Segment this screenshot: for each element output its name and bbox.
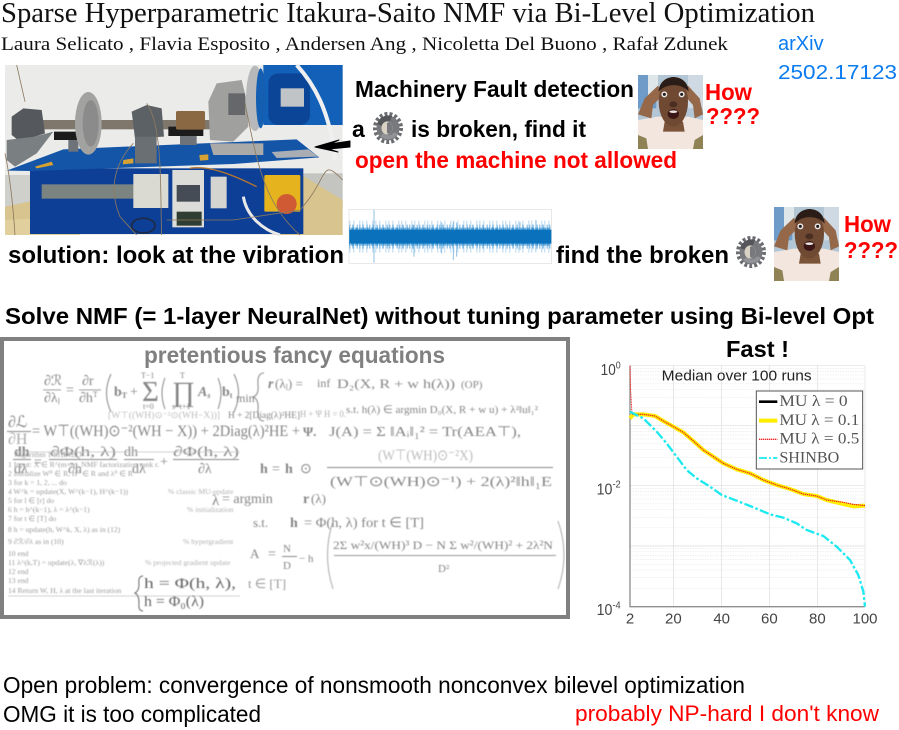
equations block: dh [124,445,138,460]
equations block: λ [212,493,220,509]
red remark: probably NP-hard I don't know [575,701,879,726]
equations block: s [206,391,210,400]
icon: gear [376,114,400,142]
text: find the broken: find the broken [556,242,729,269]
equations block: = [66,383,74,398]
x axis labels: 80 [809,611,826,628]
x axis labels: 60 [761,611,778,628]
legend: SHINBO [779,449,839,466]
y axis labels: 10 [601,362,618,379]
y axis labels: 10 [597,481,614,498]
equations block: ∂h [68,462,82,477]
equations block: T [93,390,98,399]
algorithm listing: 6 h = h^(k−1), λ = λ^(k−1) [8,505,90,514]
callout: how: How [705,79,752,105]
equations block: + [130,385,138,400]
algorithm listing: 3 for k = 1, 2, ... do [8,478,67,487]
equations block: ∂h [79,391,93,406]
equations block: 2Σ w²x/(WH)³ D − N Σ w²/(WH)² + 2λ²N [333,538,553,552]
equations block: = Φ(h, λ) for t ∈ [T] [304,516,424,531]
equations block: D [283,560,291,572]
y axis labels: -2 [612,480,621,491]
algorithm listing: Algorithm 1 SHINBO [14,450,82,459]
y axis labels: 10 [597,602,614,619]
x axis labels [626,611,878,628]
equations block: ∂H [8,431,28,448]
x axis labels: 20 [665,611,682,628]
equations block: (λ [275,376,286,391]
equations block: h [260,462,268,477]
equations block: H + 2[Diag(λ)²HE] [228,410,300,420]
panel heading: pretentious fancy equations [144,342,445,368]
arXiv reference: 2502.17123 [778,62,897,84]
equations block: [W⊤((WH)⊙⁻²⊙(WH−X))] [108,410,220,420]
photo: machinery test rig [5,65,343,235]
chart: vibration waveform [349,209,552,263]
equations block: l [286,383,289,392]
equations block: Σ [142,376,159,408]
algorithm listing: 9 ∂ℛ/∂λ as in (10) [8,537,64,546]
callout: how: How [844,211,891,237]
arrow pointing at machine [315,140,350,152]
equations block: Ψ. [303,424,316,439]
equations block: t [230,391,233,400]
x axis labels: 100 [852,611,878,628]
series: MU lambda 0.5 [632,414,865,506]
constraint system [135,576,286,611]
algorithm listing: 11 λ^(k,T) = update(λ, ∇λℛ(λ)) [8,558,105,567]
equations block: (λ) [311,491,326,506]
equations block: A [250,546,260,561]
algorithm listing: 5 for l ∈ [r] do [8,496,54,505]
panel: pretentious fancy equations [2,339,568,617]
algorithm listing: 14 Return W, H, λ at the last iteration [8,586,122,595]
y axis labels [597,360,621,619]
equations block: s.t. [253,515,268,530]
equations block [7,371,564,611]
series: MU lambda 0.1 [630,414,865,506]
legend: MU λ = 0.5 [779,431,860,448]
series: MU lambda 0.5 spike [630,366,632,414]
equations block: h [285,462,293,477]
chart: convergence curves [597,360,878,628]
open problem text: OMG it is too complicated [3,701,261,727]
equations block: H + Ψ H = 0. [300,409,346,419]
algorithm listing: 8 h = update(h, W^k, X, λ) as in (12) [8,525,121,534]
equations block: ∂r [82,374,94,389]
equations block: t=0 [143,402,154,411]
equations block: ∂ℒ [8,414,27,431]
algorithm listing: 1 Input: X ∈ R^(m×n), NMF factorization rank r. [8,460,159,469]
equations block: = [272,462,280,477]
text: a gear is broken: a [352,116,365,142]
callout: how: ???? [706,103,760,129]
open problem text [3,672,745,727]
y axis labels: 0 [616,360,621,371]
icon: shocked face [774,207,839,281]
equations block: A [198,385,207,400]
equations block: = W⊤((WH)⊙⁻²(WH − X)) + 2Diag(λ)²HE + [32,423,300,440]
callout: how [844,211,898,263]
text: a gear is broken: is broken, find it [411,116,586,142]
callout: how [705,79,760,129]
equations block: (W⊤⊙(WH)⊙⁻¹) + 2(λ)²‖h‖₁E [330,475,552,490]
equations block: b [114,385,122,400]
algorithm listing: 10 end [8,549,29,558]
equations block: ∂λ [198,462,212,477]
equations block: dλ [14,462,28,477]
equations block: s.t. h(λ) ∈ argmin D₀(X, R + w u) + λ²‖u‖₁² [346,404,539,416]
equations block: T [180,371,185,380]
algorithm listing [8,450,234,595]
equations block: h [290,516,298,531]
algorithm listing: 2 Initialize W⁰ ∈ R, H⁰ ∈ R and λ⁰ ∈ R [8,469,134,478]
chart note: Median over 100 runs [662,368,812,384]
icon: gear [738,238,764,266]
algorithm listing: 13 end [8,576,29,585]
authors: Laura Selicato , Flavia Esposito , Andersen Ang , Nicoletta Del Buono , Rafał Zdunek [1,35,729,55]
equations block: ∂ℛ [44,374,62,389]
equations block: ∂Φ(h, λ) [50,445,116,460]
equations block: dh [14,445,30,460]
equations block: ) = [288,376,303,391]
equations block: l [58,397,61,406]
equations block: − h [299,553,314,565]
algorithm listing: 4 W^k = update(X, W^(k−1), H^(k−1)) [8,487,129,496]
x axis labels: 40 [713,611,730,628]
equations block: T−1 [141,371,154,380]
heading: machinery fault detection: Machinery Fault detection [355,76,634,102]
equations block: + [160,455,168,470]
legend [756,391,863,469]
equations block: ⊙ [300,462,312,477]
equations block: T [122,391,128,400]
constraint system: h = Φ(h, λ), [144,576,236,592]
algorithm listing: % projected gradient update [145,558,231,567]
constraint system: h = Φ₀(λ) [144,594,204,610]
arXiv reference: arXiv [778,33,824,55]
algorithm listing: % classic MU-update [168,487,234,496]
series: SHINBO [630,412,865,607]
equations block: N [283,543,291,555]
x axis labels: 2 [626,611,634,628]
open problem text: Open problem: convergence of nonsmooth nonconvex bilevel optimization [3,672,745,698]
series: MU lambda 0 [827,500,865,506]
equations block: (OP) [461,379,483,391]
equations block: r [268,377,274,392]
legend: MU λ = 0 [779,393,848,410]
equations block: = argmin [222,492,273,507]
equations block: ∏ [172,377,195,408]
icon: shocked face [638,75,703,149]
equations block: J(A) = Σ ‖Aᵢ‖₁² = Tr(AEA⊤), [329,425,521,440]
constraint system: t ∈ [T] [248,576,286,591]
equations block: inf [317,376,330,390]
equations block: (W⊤(WH)⊙⁻²X) [378,448,473,464]
equations block: s=t+1 [172,402,190,411]
equations block: = [34,455,42,470]
warning text: open the machine not allowed [355,147,677,173]
legend: MU λ = 0.1 [779,412,859,429]
text: solution: solution: look at the vibration [8,242,344,269]
algorithm listing: 12 end [8,567,29,576]
equations block: = [268,547,276,562]
equations block: D² [438,563,450,575]
arXiv reference [778,33,897,84]
equations block: b [222,385,230,400]
algorithm listing: % initialization [187,505,234,514]
equations block: r [303,492,309,507]
section heading: Solve NMF (= 1-layer NeuralNet) without tuning parameter using Bi-level Opt [5,303,874,329]
equations block: dλ [132,462,146,477]
equations block: D₂(X, R + w h(λ)) [337,376,455,391]
equations block: ∂λ [44,391,58,406]
y axis labels: -4 [612,600,621,611]
algorithm listing: % hypergradient [183,537,234,546]
heading: fast: Fast ! [726,336,789,362]
algorithm listing: 7 for t ∈ [T] do [8,514,56,523]
callout: how: ???? [844,237,898,263]
equations block: min [236,391,255,405]
equations block: ∂Φ(h, λ) [173,445,239,460]
